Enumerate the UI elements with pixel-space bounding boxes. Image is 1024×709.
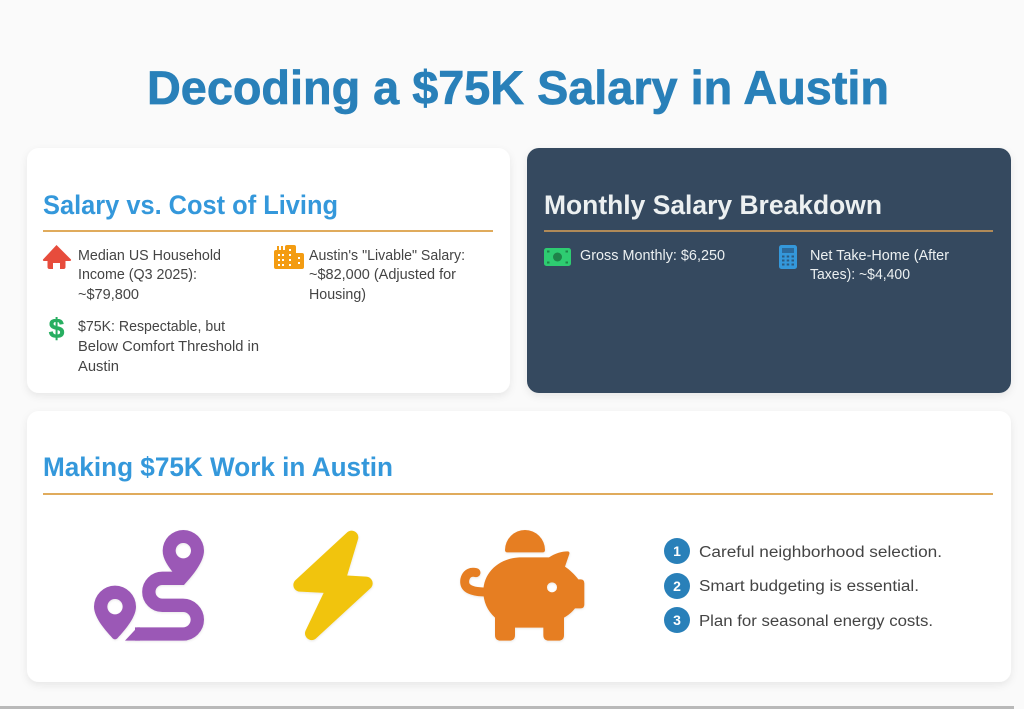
livable salary text: ~$82,000 (Adjusted for — [309, 267, 456, 283]
item 2 — [664, 573, 919, 599]
icon: dollar sign: $ — [49, 313, 65, 344]
livable salary text: Housing) — [309, 287, 366, 303]
median income text — [78, 248, 221, 303]
heading: monthly salary breakdown: Monthly Salary Breakdown — [544, 190, 882, 220]
panel: making 75k work — [27, 411, 1011, 682]
icon: calculator — [779, 245, 797, 269]
item 3: Plan for seasonal energy costs. — [699, 613, 933, 630]
respectable text: Austin — [78, 359, 119, 375]
panel: salary vs cost of living — [27, 148, 510, 393]
icon: lightning bolt — [300, 537, 366, 633]
numbered list — [664, 538, 942, 633]
panel: monthly salary breakdown — [527, 148, 1011, 393]
title: Decoding a $75K Salary in Austin — [147, 61, 889, 114]
livable salary text: Austin's "Livable" Salary: — [309, 248, 465, 264]
respectable text: Below Comfort Threshold in — [78, 339, 259, 355]
item 2: 2 — [673, 578, 681, 594]
gross monthly text: Gross Monthly: $6,250 — [580, 248, 725, 264]
icon: house — [43, 245, 71, 269]
net take-home text: Taxes): ~$4,400 — [810, 267, 910, 283]
icon: route with pins — [94, 530, 204, 641]
respectable text: $75K: Respectable, but — [78, 319, 225, 335]
median income text: ~$79,800 — [78, 287, 139, 303]
icon: city buildings — [274, 245, 304, 269]
item 1: 1 — [673, 543, 681, 559]
heading: making 75k work: Making $75K Work in Austin — [43, 452, 393, 482]
net take-home text: Net Take-Home (After — [810, 248, 949, 264]
item 1: Careful neighborhood selection. — [699, 544, 942, 561]
icon: cash — [544, 248, 571, 266]
item 3: 3 — [673, 612, 681, 628]
icon: piggy bank — [465, 530, 584, 641]
item 3 — [664, 607, 933, 633]
net take-home text — [810, 248, 949, 283]
item 1 — [664, 538, 942, 564]
median income text: Median US Household — [78, 248, 221, 264]
respectable text — [78, 319, 259, 375]
item 2: Smart budgeting is essential. — [699, 578, 919, 595]
median income text: Income (Q3 2025): — [78, 267, 197, 283]
livable salary text — [309, 248, 465, 303]
heading: salary vs cost of living: Salary vs. Cost of Living — [43, 190, 338, 220]
